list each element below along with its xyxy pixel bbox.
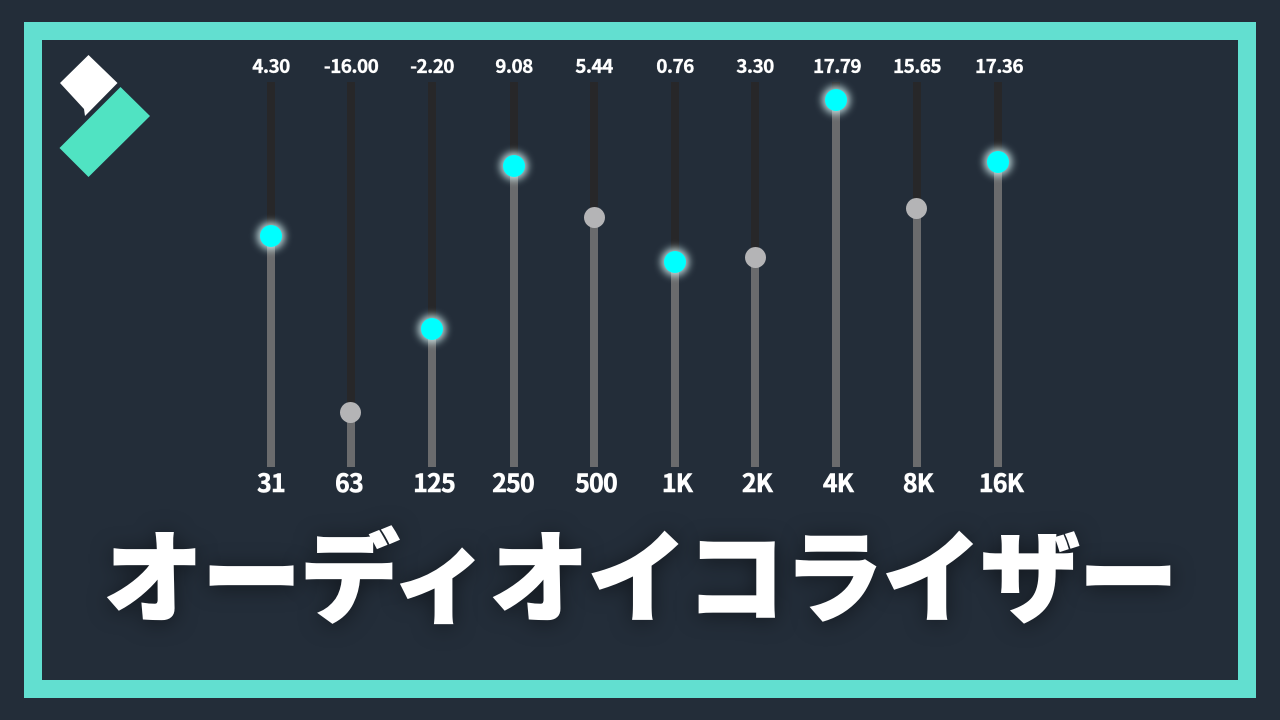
slider 16K: 17.36 — [975, 52, 1023, 79]
slider 2K: 2K — [742, 464, 772, 500]
slider 8K: 8K — [903, 464, 933, 500]
slider 500 — [575, 52, 617, 500]
logo — [60, 55, 150, 177]
slider 8K: 15.65 — [893, 52, 941, 79]
slider 16K: 16K — [979, 464, 1023, 500]
slider 500: 500 — [575, 464, 617, 500]
slider 63: 63 — [335, 464, 363, 500]
slider 4K — [813, 52, 861, 500]
slider 31 — [251, 52, 291, 500]
slider 2K — [736, 52, 774, 500]
slider 125 — [410, 52, 455, 500]
slider 1K: 0.76 — [656, 52, 694, 79]
slider 2K: 3.30 — [736, 52, 774, 79]
slider 63 — [324, 52, 378, 500]
slider 1K: 1K — [662, 464, 692, 500]
slider 125: 125 — [413, 464, 455, 500]
slider 31: 31 — [257, 464, 285, 500]
slider 4K: 17.79 — [813, 52, 861, 79]
slider 8K — [893, 52, 941, 500]
slider 250: 9.08 — [495, 52, 533, 79]
title: オーディオイコライザー — [103, 498, 1177, 643]
slider 31: 4.30 — [252, 52, 290, 79]
slider 16K — [975, 52, 1024, 500]
slider 125: -2.20 — [410, 52, 454, 79]
slider 63: -16.00 — [324, 52, 378, 79]
icon: white diamond — [60, 55, 118, 116]
icon: teal bar — [60, 87, 150, 177]
slider 250: 250 — [492, 464, 534, 500]
slider 4K: 4K — [823, 464, 853, 500]
slider 250 — [492, 52, 534, 500]
slider 500: 5.44 — [575, 52, 613, 79]
slider 1K — [655, 52, 695, 500]
